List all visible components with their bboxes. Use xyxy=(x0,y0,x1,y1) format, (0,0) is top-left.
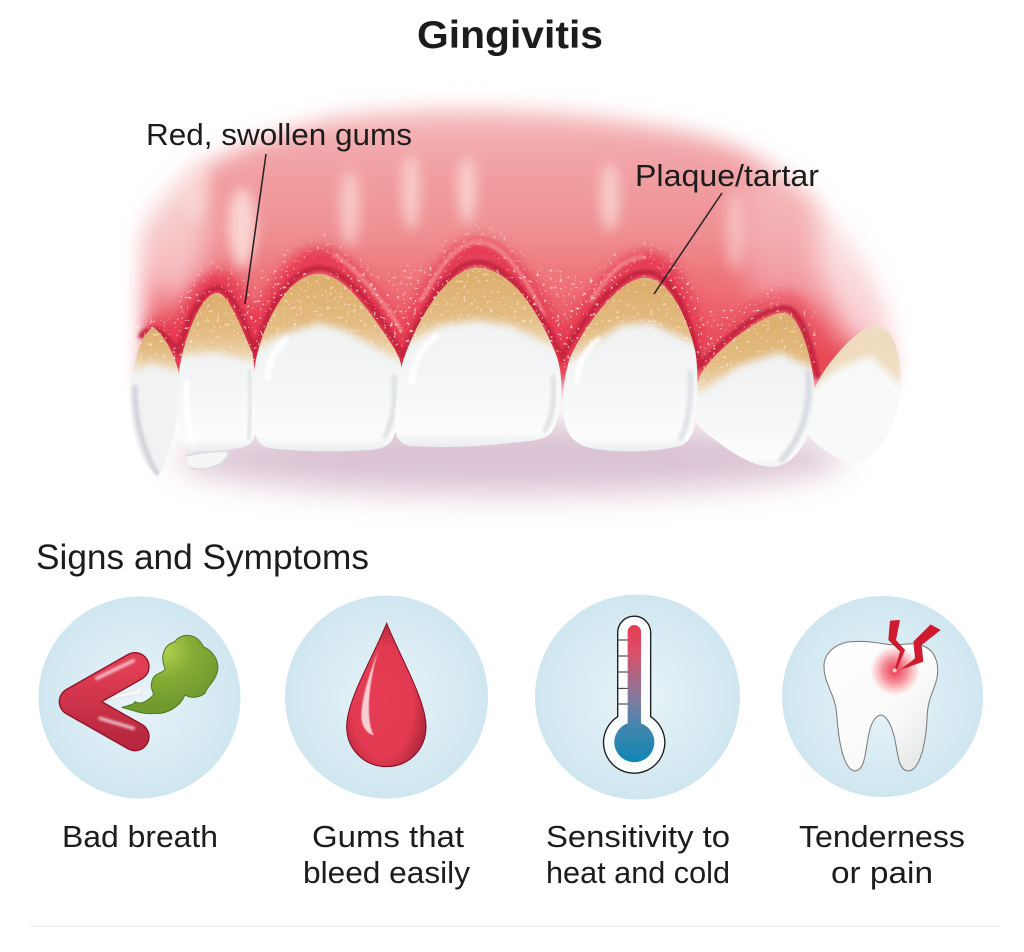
icon circle xyxy=(782,596,983,797)
icon circle xyxy=(285,596,488,798)
inflamed gum margin xyxy=(140,242,818,378)
central incisor left xyxy=(250,270,405,455)
label: plaque/tartar: Plaque/tartar xyxy=(635,158,819,193)
symptom: tenderness or pain xyxy=(782,596,983,890)
shadow beneath teeth xyxy=(175,422,845,494)
title: Gingivitis xyxy=(417,14,603,57)
icon: tooth with pain cracks xyxy=(824,620,941,771)
icon: blood drop xyxy=(347,623,426,767)
far left tooth xyxy=(130,327,179,477)
leader line: red swollen gums xyxy=(245,154,266,304)
label: Gums that xyxy=(312,819,464,854)
label: red swollen gums: Red, swollen gums xyxy=(146,117,412,152)
gum tissue xyxy=(136,109,942,385)
section heading: Signs and Symptoms xyxy=(36,538,369,577)
upper right tooth xyxy=(696,313,814,467)
symptom: temperature sensitivity: heat and cold xyxy=(546,855,730,890)
symptom: tenderness or pain: or pain xyxy=(831,855,933,890)
icon circle xyxy=(535,594,740,800)
icon: thermometer xyxy=(603,616,665,773)
small lower tooth edge xyxy=(185,451,229,469)
central incisor middle xyxy=(392,265,564,450)
label: Sensitivity to xyxy=(546,819,730,854)
symptom: bleeding gums: bleed easily xyxy=(303,855,471,890)
right central tooth xyxy=(560,275,700,455)
tartar speckle texture xyxy=(136,265,816,392)
dental illustration: upper teeth with gingivitis xyxy=(128,109,942,494)
lateral tooth xyxy=(178,293,255,452)
icon: mouth and odor cloud xyxy=(73,635,218,737)
label: Tenderness xyxy=(799,819,965,854)
symptom: temperature sensitivity xyxy=(535,594,740,890)
label: Bad breath xyxy=(62,819,218,854)
symptom: bad breath xyxy=(38,596,240,854)
leader line: plaque/tartar xyxy=(654,193,722,294)
far right tooth xyxy=(808,326,901,459)
symptom: bleeding gums xyxy=(285,596,488,890)
icon circle xyxy=(38,596,240,798)
gum shine specks xyxy=(146,224,784,368)
